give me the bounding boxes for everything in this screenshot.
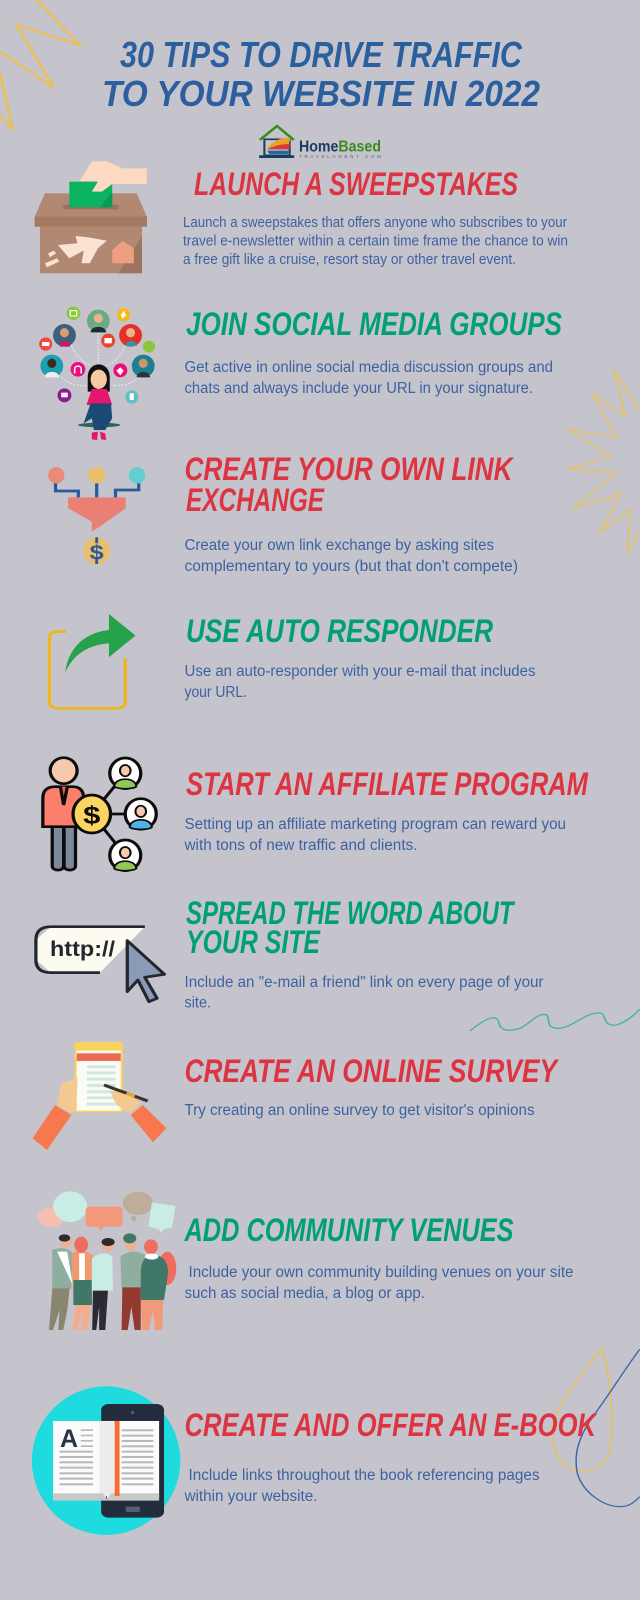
text block: complementary to yours (but that don't compete) xyxy=(184,558,518,575)
text block: such as social media, a blog or app. xyxy=(184,1285,425,1302)
text block: your URL. xyxy=(184,684,247,701)
text block xyxy=(184,974,544,1012)
panel: create an online survey xyxy=(33,1042,559,1150)
text block: Include links throughout the book referencing pages xyxy=(188,1467,540,1484)
text block xyxy=(184,359,553,397)
text block: Launch a sweepstakes that offers anyone who subscribes to your xyxy=(183,214,567,231)
text block xyxy=(184,663,536,701)
heading: EXCHANGE xyxy=(186,482,325,518)
label: http: http:// xyxy=(50,938,115,961)
text block: Get active in online social media discussion groups and xyxy=(184,359,553,376)
decoration: yellow zigzag top left xyxy=(0,0,80,130)
heading: USE AUTO RESPONDER xyxy=(186,613,493,649)
decoration: green squiggle xyxy=(470,1009,640,1031)
icon: woman with social media bubbles xyxy=(39,307,155,440)
text block: travel e-newsletter within a certain time frame the chance to win xyxy=(183,232,568,250)
text block xyxy=(184,1264,574,1302)
panel: launch a sweepstakes xyxy=(35,161,568,273)
heading xyxy=(184,451,515,518)
heading: YOUR SITE xyxy=(186,924,321,960)
heading: CREATE YOUR OWN LINK xyxy=(184,451,515,487)
text block: Create your own link exchange by asking sites xyxy=(184,537,494,554)
icon: group of people talking with speech bubbles xyxy=(38,1191,176,1330)
label: letter A: A xyxy=(60,1425,78,1453)
title xyxy=(102,34,540,114)
text block: site. xyxy=(184,994,211,1012)
icon: ballot box with hand xyxy=(35,161,147,273)
icon: funnel with dollar coin: $ xyxy=(90,541,104,564)
text block: a free gift like a cruise, resort stay or other travel event. xyxy=(183,251,516,268)
text block: Setting up an affiliate marketing program can reward you xyxy=(184,816,566,833)
decoration: yellow and blue loops xyxy=(552,1348,640,1507)
panel: create your own link exchange xyxy=(48,451,518,575)
logo: HomeBased Travel Agent: TRAVELAGENT.COM xyxy=(299,154,381,159)
text block: with tons of new traffic and clients. xyxy=(184,837,418,854)
icon: businessman with affiliate network: $ xyxy=(83,800,101,829)
icon: funnel with dollar coin xyxy=(48,467,145,565)
panel: start an affiliate program xyxy=(43,758,589,871)
text block xyxy=(184,816,566,854)
heading: CREATE AN ONLINE SURVEY xyxy=(184,1053,559,1089)
icon: businessman with affiliate network xyxy=(43,758,156,871)
text block: within your website. xyxy=(184,1488,318,1505)
heading xyxy=(186,895,515,960)
text block xyxy=(184,1467,540,1505)
logo: HomeBased Travel Agent: HomeBased xyxy=(299,138,381,156)
icon: http address bar and cursor xyxy=(36,927,164,1002)
icon: open book on phone in teal circle xyxy=(32,1386,180,1535)
text block xyxy=(183,214,568,268)
heading: LAUNCH A SWEEPSTAKES xyxy=(194,166,519,202)
decoration: yellow zigzag right xyxy=(569,370,640,553)
title: TO YOUR WEBSITE IN 2022 xyxy=(102,73,540,114)
icon: hands holding clipboard xyxy=(33,1042,166,1150)
text block: Include an "e-mail a friend" link on every page of your xyxy=(184,974,544,991)
text block xyxy=(184,537,518,575)
text block: Try creating an online survey to get visitor's opinions xyxy=(184,1102,535,1119)
heading: ADD COMMUNITY VENUES xyxy=(184,1212,514,1248)
title: 30 TIPS TO DRIVE TRAFFIC xyxy=(120,34,523,75)
heading: JOIN SOCIAL MEDIA GROUPS xyxy=(186,306,563,342)
heading: SPREAD THE WORD ABOUT xyxy=(186,895,515,931)
panel: add community venues xyxy=(38,1191,573,1330)
panel: create and offer an e-book xyxy=(32,1386,598,1535)
panel: use auto responder xyxy=(49,613,536,708)
text block: Use an auto-responder with your e-mail that includes xyxy=(184,663,536,680)
panel: spread the word about your site xyxy=(36,895,544,1012)
logo: HomeBased Travel Agent xyxy=(259,126,381,159)
text block: Include your own community building venues on your site xyxy=(188,1264,574,1281)
panel: join social media groups xyxy=(39,306,563,440)
text block: chats and always include your URL in your signature. xyxy=(184,380,533,397)
icon: share arrow in frame xyxy=(49,614,135,708)
